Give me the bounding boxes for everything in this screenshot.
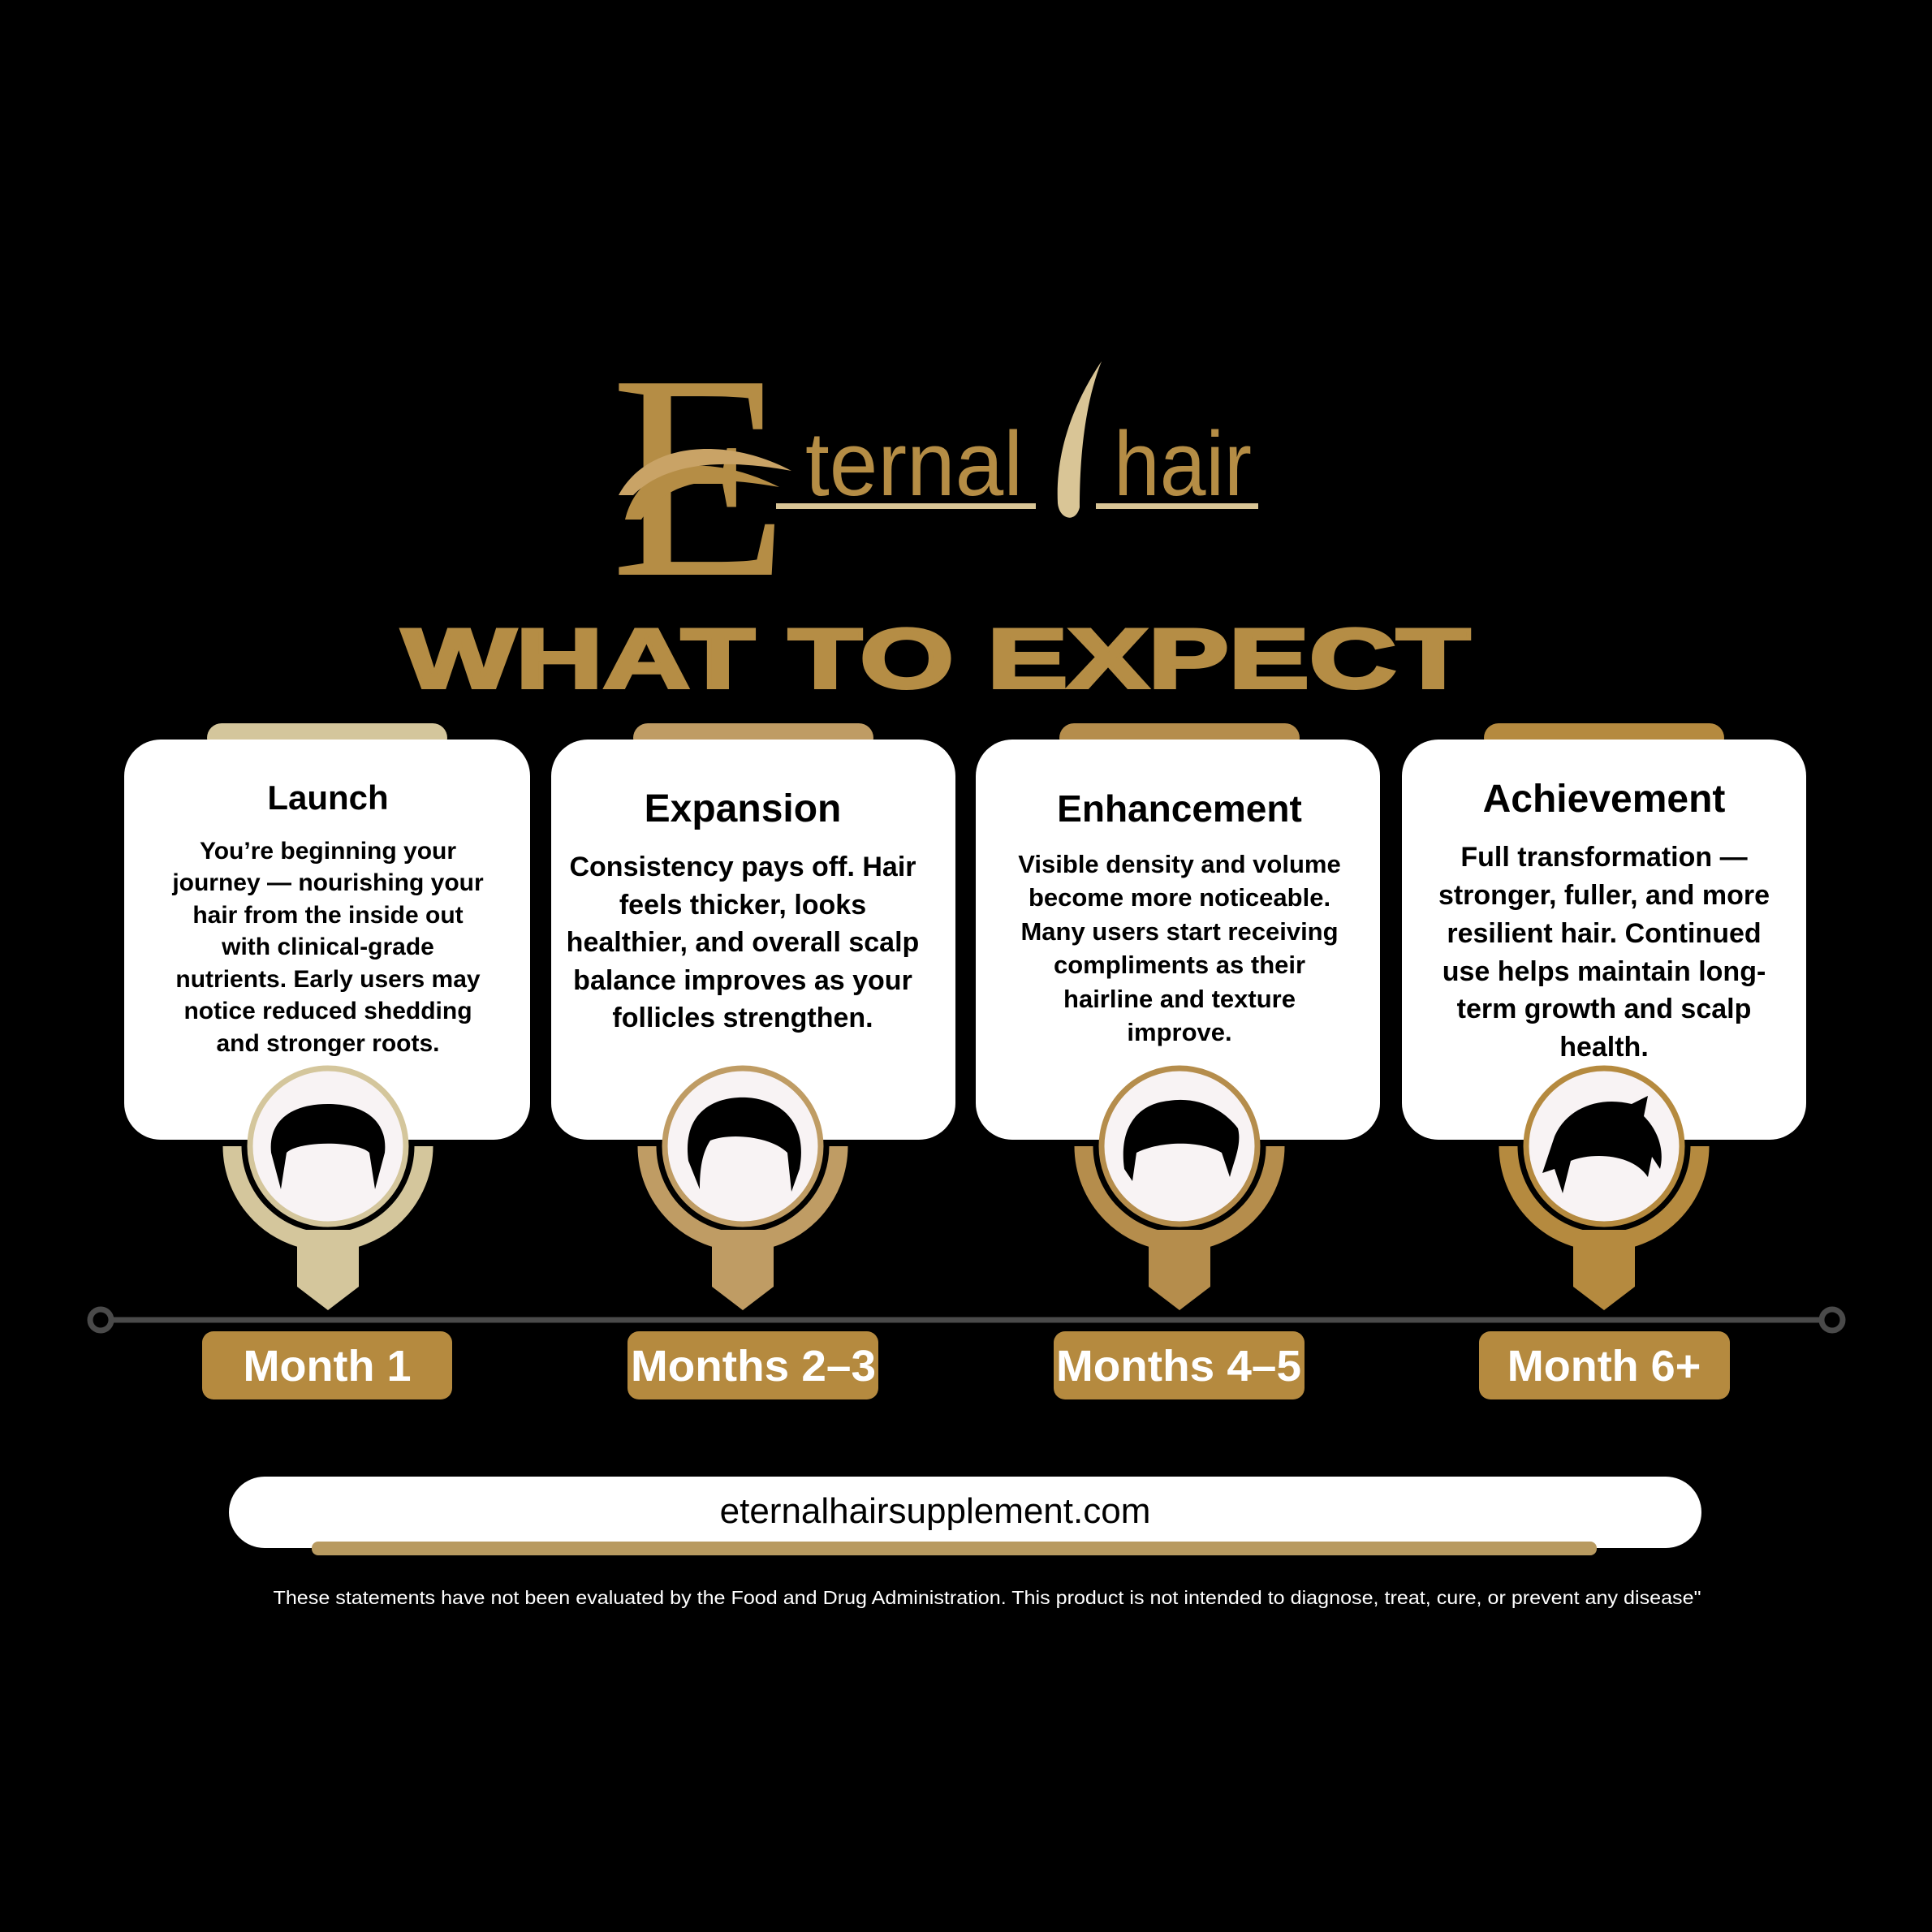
panel: enhancement: [976, 723, 1380, 1140]
panel: launch: notice reduced shedding: [183, 998, 472, 1024]
label: month 1: Month 1: [244, 1342, 411, 1391]
panel: launch: hair from the inside out: [192, 902, 464, 929]
panel: expansion: Consistency pays off. Hair: [569, 852, 916, 882]
icon: marker 1: [232, 1068, 424, 1310]
logo: E: [610, 314, 789, 638]
panel: launch: [124, 723, 530, 1140]
panel: enhancement: improve.: [1127, 1018, 1232, 1046]
panel: expansion: healthier, and overall scalp: [567, 927, 919, 958]
icon: marker 3: [1084, 1068, 1275, 1310]
title: WHAT TO EXPECT: [402, 612, 1470, 706]
logo: hair: [1114, 413, 1252, 515]
icon: marker 4: [1508, 1068, 1700, 1310]
panel: enhancement: compliments as their: [1054, 951, 1305, 979]
panel: achievement: use helps maintain long-: [1443, 956, 1766, 987]
panel: achievement: [1402, 723, 1806, 1140]
panel: achievement: stronger, fuller, and more: [1438, 880, 1770, 911]
logo: ternal: [805, 413, 1023, 515]
panel: expansion: [551, 723, 955, 1140]
label: months 4-5: Months 4–5: [1056, 1342, 1301, 1391]
panel: achievement: Achievement: [1483, 778, 1725, 821]
panel: enhancement: Enhancement: [1057, 787, 1302, 830]
panel: launch: Launch: [267, 778, 389, 817]
label: months 4-5: [1054, 1331, 1305, 1399]
panel: launch: and stronger roots.: [216, 1030, 440, 1057]
panel: enhancement: hairline and texture: [1063, 985, 1296, 1013]
panel: enhancement: Many users start receiving: [1020, 917, 1339, 946]
panel: achievement: Full transformation —: [1460, 842, 1748, 873]
panel: expansion: feels thicker, looks: [619, 890, 866, 921]
url pill: eternalhairsupplement.com: [720, 1491, 1150, 1531]
timeline: [90, 1309, 1843, 1330]
icon: hair strand: [1058, 361, 1102, 518]
panel: launch: journey — nourishing your: [171, 869, 484, 896]
panel: enhancement: become more noticeable.: [1029, 883, 1330, 912]
url pill: [229, 1477, 1701, 1555]
panel: launch: nutrients. Early users may: [175, 966, 481, 993]
panel: launch: You’re beginning your: [200, 838, 456, 865]
panel: expansion: follicles strengthen.: [612, 1003, 873, 1033]
label: month 6+: [1479, 1331, 1730, 1399]
panel: launch: with clinical-grade: [221, 934, 434, 960]
label: months 2-3: Months 2–3: [631, 1342, 876, 1391]
label: month 6+: Month 6+: [1507, 1342, 1701, 1391]
disclaimer: These statements have not been evaluated by the Food and Drug Administration. This product is not intended to diagnose, treat, cure, or prevent any disease": [273, 1587, 1701, 1608]
panel: achievement: resilient hair. Continued: [1447, 918, 1762, 949]
panel: expansion: balance improves as your: [573, 965, 912, 996]
label: months 2-3: [627, 1331, 878, 1399]
panel: enhancement: Visible density and volume: [1018, 850, 1341, 878]
label: month 1: [202, 1331, 452, 1399]
panel: expansion: Expansion: [645, 787, 841, 830]
panel: achievement: term growth and scalp: [1457, 994, 1751, 1024]
panel: achievement: health.: [1559, 1032, 1649, 1063]
logo: [610, 314, 1258, 638]
icon: marker 2: [647, 1068, 839, 1310]
